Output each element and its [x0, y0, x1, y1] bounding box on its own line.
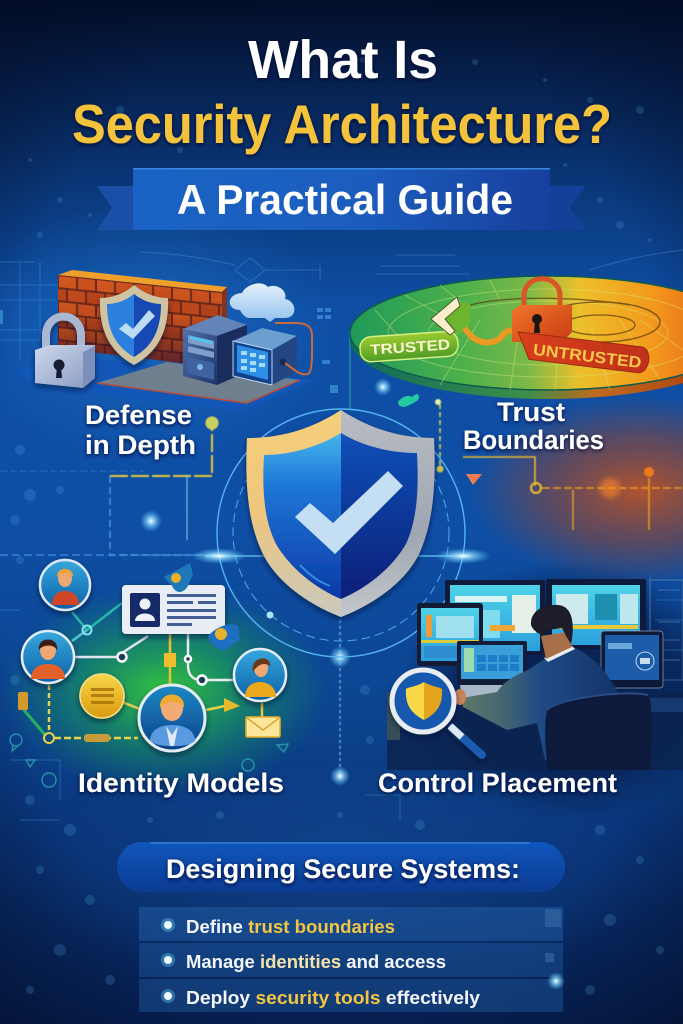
- monitor: center: [445, 580, 545, 655]
- icon: appliance: [233, 323, 312, 385]
- list row 1: Define trust boundaries: [186, 916, 395, 937]
- tablet: left: [417, 603, 483, 666]
- untrusted tag: [515, 332, 650, 374]
- glow accents: [140, 378, 620, 786]
- avatar: left: [22, 631, 74, 683]
- monitor: small right: [601, 631, 663, 688]
- monitor: right: [546, 579, 646, 649]
- ribbon banner: subtitle: A Practical Guide: [177, 176, 513, 223]
- panel: trust boundaries: [350, 276, 683, 455]
- chat icons: [10, 734, 288, 787]
- desk: [387, 692, 683, 770]
- side panel: [650, 580, 683, 680]
- trusted tag: [359, 331, 459, 362]
- office chair: [545, 693, 652, 770]
- central shield with checkmark: [246, 410, 435, 617]
- icon: gold coin: [80, 674, 124, 718]
- network links: [24, 603, 262, 743]
- untrusted tag: UNTRUSTED: [532, 342, 642, 372]
- lens flares: [191, 548, 491, 564]
- connector link: [465, 328, 525, 343]
- heading: defense in depth: in Depth: [85, 430, 196, 460]
- icon: padlock: [35, 316, 95, 388]
- avatar: top left: [40, 560, 90, 610]
- list row 3: Deploy security tools effectively: [186, 987, 481, 1008]
- heading pill: [117, 842, 565, 892]
- heading: defense in depth: [85, 400, 196, 460]
- icon: small shield: [100, 285, 168, 365]
- list row 3: [139, 979, 563, 1012]
- laptop: [457, 641, 527, 700]
- heading pill: Designing Secure Systems:: [166, 854, 520, 884]
- icon: key badge bottom: [208, 624, 240, 650]
- icon: server tower: [183, 315, 247, 385]
- panel: identity models: [10, 560, 288, 798]
- connector nodes: [18, 692, 240, 742]
- heading: trust boundaries: Boundaries: [463, 425, 604, 455]
- list row 1: [139, 907, 563, 941]
- orbit rings around central shield: [0, 409, 470, 657]
- heading: trust boundaries: Trust: [497, 397, 565, 427]
- list row 2: [139, 943, 563, 977]
- avatar: right: [234, 649, 286, 701]
- icon: key badge top: [164, 563, 193, 592]
- title line 1: What Is: [248, 30, 438, 90]
- list row 2: Manage identities and access: [186, 951, 446, 972]
- heading: defense in depth: Defense: [85, 400, 192, 430]
- panel: defense in depth: [15, 270, 313, 460]
- trusted tag: TRUSTED: [370, 337, 451, 359]
- heading: control placement: Control Placement: [378, 768, 617, 798]
- circuit traces: [110, 330, 683, 780]
- person at desk: [454, 605, 618, 760]
- icon: magnifier with shield: [392, 670, 482, 755]
- icon: check badge: [431, 297, 471, 335]
- ribbon banner: subtitle: [97, 168, 586, 230]
- heading: trust boundaries: [463, 397, 604, 455]
- icon: cloud: [230, 283, 294, 322]
- title line 2: Security Architecture?: [72, 93, 612, 155]
- panel: designing secure systems: [117, 842, 565, 1012]
- floor platform: [15, 356, 313, 411]
- icon: ID card: [122, 585, 225, 634]
- brick firewall: [58, 270, 227, 368]
- avatar: center: [139, 685, 205, 751]
- decorative glow dot: [545, 909, 565, 990]
- panel: control placement: [378, 579, 683, 798]
- heading: identity models: Identity Models: [78, 768, 284, 798]
- icon: red padlock: [512, 279, 572, 342]
- icon: envelope: [246, 717, 280, 737]
- boundary disc: [350, 276, 683, 399]
